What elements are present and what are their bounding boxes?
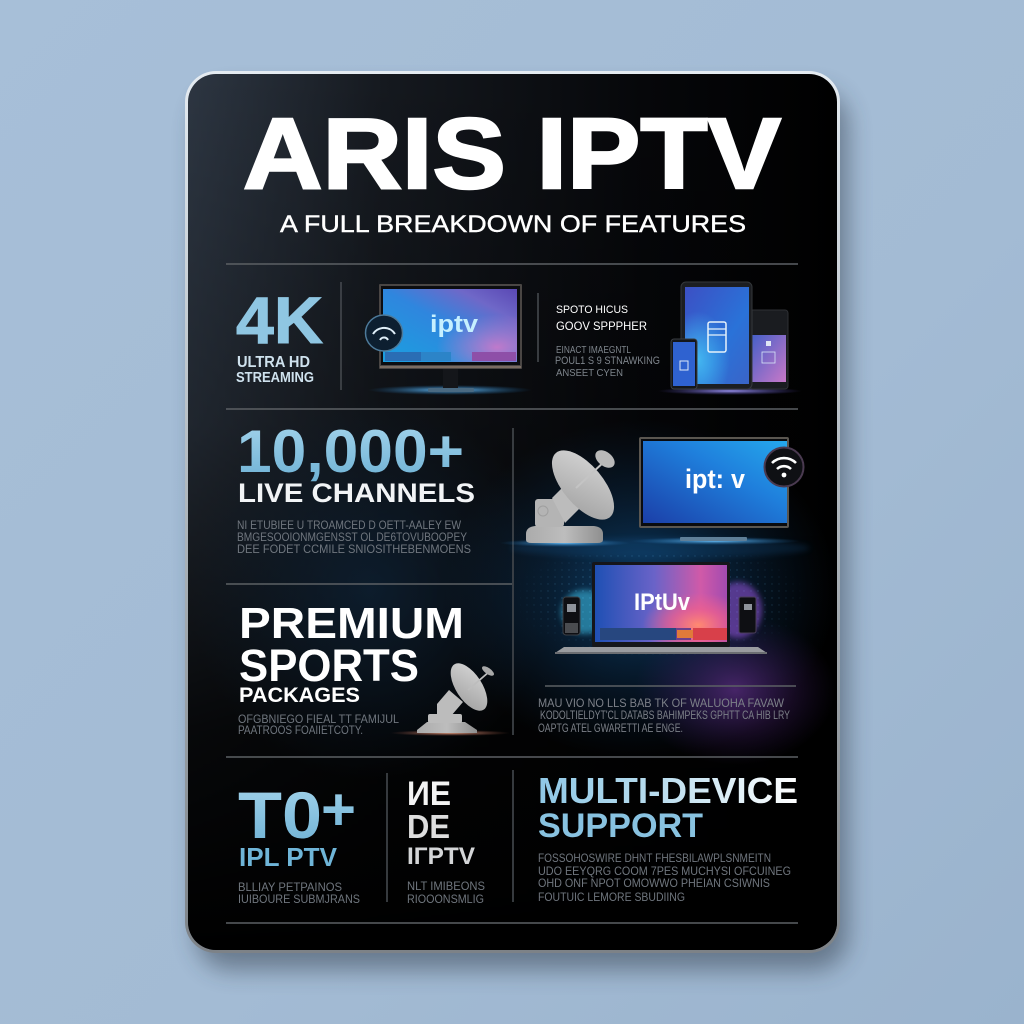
label: streaming: STREAMING — [236, 370, 314, 386]
heading: support: SUPPORT — [538, 807, 703, 845]
description: IUIBOURE SUBMJRANS — [238, 892, 360, 906]
icon: wifi badge — [366, 315, 402, 351]
description: BMGESOOIONMGENSST OL DE6TOVUBOOPEY — [237, 530, 467, 544]
text block: device notes — [555, 304, 660, 379]
icon: laptop with phones — [555, 562, 767, 654]
stat: T0+: T0 — [238, 778, 322, 852]
description — [538, 696, 790, 735]
text block: device notes: POUL1 S 9 STNAWKING — [555, 355, 660, 367]
description: FOUTUIC LEMORE SBUDIING — [538, 890, 685, 904]
screen label: ipt: v — [685, 464, 745, 494]
description — [538, 851, 791, 904]
title: ARIS IPTV — [243, 98, 781, 210]
screen label: iptv — [430, 311, 479, 338]
description — [238, 712, 399, 737]
subtitle: A FULL BREAKDOWN OF FEATURES — [280, 211, 746, 238]
icon: wifi badge — [764, 448, 804, 486]
heading: packages: PACKAGES — [239, 684, 360, 707]
heading: live channels: LIVE CHANNELS — [238, 478, 475, 508]
stat: 4K: 4K — [236, 283, 323, 357]
description: BLLIAY PETPAINOS — [238, 880, 342, 894]
description: NLT IMIBEONS — [407, 879, 485, 893]
card shadow — [196, 90, 848, 970]
icon: small satellite dish — [390, 657, 510, 736]
panel: tablet card — [185, 71, 840, 953]
description — [407, 879, 485, 906]
text block: device notes: SPOTO HICUS — [556, 304, 628, 316]
description — [237, 518, 471, 556]
tablet — [681, 282, 752, 389]
description: FOSSOHOSWIRE DHNT FHESBILAWPLSNMEITN — [538, 851, 771, 865]
heading: iptv: IГPTV — [407, 843, 475, 870]
screen label: IPtUv — [634, 589, 691, 616]
phone left — [671, 339, 697, 389]
description: OHD ONF NPOT OMOWWO PHEIAN CSIWNIS — [538, 876, 770, 890]
stat plus sign: + — [321, 776, 356, 843]
heading: premium: PREMIUM — [239, 599, 464, 648]
panel: 4K streaming — [236, 283, 323, 386]
heading: de: DE — [407, 808, 450, 845]
icon: large satellite dish — [500, 440, 630, 547]
label: ipl ptv: IPL PTV — [239, 842, 338, 872]
icon: tablet and phones — [658, 282, 802, 395]
description: KODOLTIELDYT'CL DATABS BAHIMPEKS GPHTT CA HIB LRY — [540, 708, 790, 722]
description: DEE FODET CCMILE SNIOSITHEBENMOENS — [237, 542, 471, 556]
text block: device notes: EINACT IMAEGNTL — [556, 345, 631, 356]
description: OAPTG ATEL GWARETTI AE ENGE. — [538, 721, 683, 735]
heading: sports: SPORTS — [239, 640, 419, 691]
description: MAU VIO NO LLS BAB TK OF WALUOHA FAVAW — [538, 696, 785, 710]
panel: iptv devices illustration — [500, 437, 810, 735]
description: NI ETUBIEE U TROAMCED D OETT-AALEY EW — [237, 518, 462, 532]
description: PAATROOS FOAIIETCOTY. — [238, 723, 363, 737]
panel: multi-device support — [538, 770, 798, 904]
panel: live channels — [237, 418, 475, 556]
text block: device notes: ANSEET CYEN — [556, 368, 623, 379]
heading: ne: ИE — [407, 775, 451, 813]
panel: premium sports — [238, 599, 510, 737]
description: OFGBNIEGO FIEAL TT FAMIJUL — [238, 712, 399, 726]
icon: television — [630, 437, 804, 545]
icon: monitor — [366, 284, 532, 395]
description: UDO EEYQRG COOM 7PES MUCHYSI OFCUINEG — [538, 864, 791, 878]
panel: T0+ IPL PTV — [238, 776, 360, 906]
label: ultra hd: ULTRA HD — [237, 354, 310, 371]
stat: 10,000+: 10,000+ — [237, 418, 464, 485]
phone right — [750, 310, 788, 389]
text block: device notes: GOOV SPPPHER — [556, 319, 647, 333]
description: RIOOONSMLIG — [407, 892, 484, 906]
heading: multi-device: MULTI-DEVICE — [538, 770, 798, 811]
description — [238, 880, 360, 906]
panel: NE DE IPTV — [407, 775, 485, 906]
